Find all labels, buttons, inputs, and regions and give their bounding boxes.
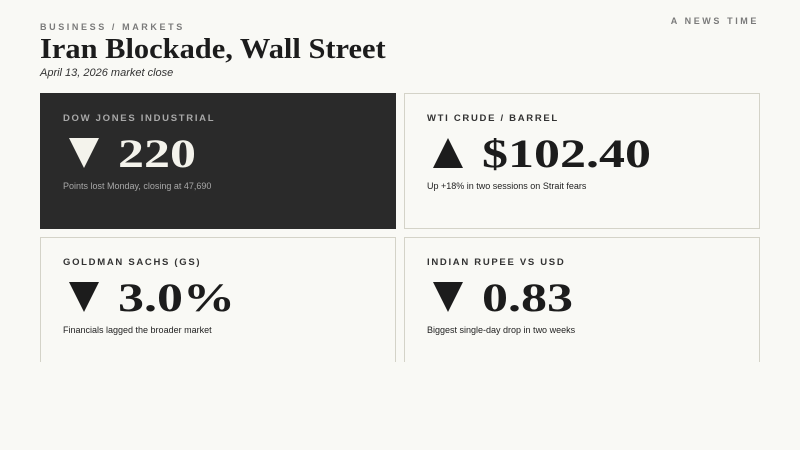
panel: dow jones: DOW JONES INDUSTRIAL <box>63 113 215 124</box>
panel: wti crude: WTI CRUDE / BARREL <box>427 113 559 124</box>
value: 102.40: $102.40 <box>482 130 651 176</box>
panel: wti crude: Up +18% in two sessions on Strait fears <box>427 181 586 191</box>
panel: rupee: Biggest single-day drop in two weeks <box>427 325 575 335</box>
panel: goldman: Financials lagged the broader market <box>63 325 212 335</box>
value: 0.83 <box>433 274 573 320</box>
kicker: BUSINESS / MARKETS <box>40 22 185 32</box>
title: Iran Blockade, Wall Street <box>40 33 386 65</box>
panel: goldman <box>40 237 396 367</box>
bottom cover <box>0 362 800 450</box>
panel: goldman: GOLDMAN SACHS (GS) <box>63 257 201 268</box>
brand: A NEWS TIME <box>671 16 759 26</box>
panel: wti crude <box>404 93 760 229</box>
panel: rupee: INDIAN RUPEE VS USD <box>427 257 565 268</box>
value: 220: 220 <box>118 130 196 176</box>
panel: dow jones <box>40 93 396 229</box>
value: 220 <box>69 130 196 176</box>
date: April 13, 2026 market close <box>40 67 173 79</box>
value: 0.83: 0.83 <box>482 274 573 320</box>
panel: dow jones: Points lost Monday, closing at 47,690 <box>63 181 211 191</box>
panel: rupee <box>404 237 760 367</box>
value: 3.0%: 3.0% <box>118 274 235 320</box>
